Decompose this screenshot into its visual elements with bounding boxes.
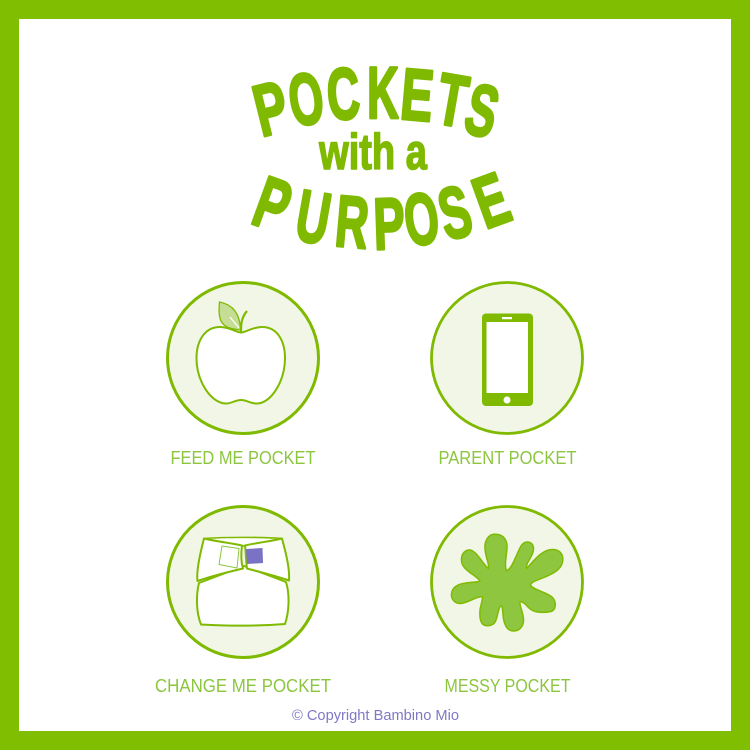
icon: nappy bbox=[197, 537, 289, 626]
icon: smartphone bbox=[482, 314, 533, 406]
title line: POCKETS: K bbox=[367, 53, 399, 134]
panel: messy pocket bbox=[432, 506, 582, 696]
title line: PURPOSE: O bbox=[399, 177, 444, 262]
title line: PURPOSE: P bbox=[243, 162, 301, 249]
title line: POCKETS: C bbox=[324, 52, 362, 136]
title line: POCKETS: S bbox=[458, 67, 507, 154]
copyright: © Copyright Bambino Mio bbox=[292, 707, 459, 724]
title line: POCKETS: T bbox=[431, 59, 474, 144]
panel: change me pocket bbox=[155, 506, 331, 696]
label: parent pocket: PARENT POCKET bbox=[438, 448, 576, 468]
icon circle: phone background bbox=[432, 282, 582, 434]
icon: apple bbox=[196, 302, 285, 404]
title line: with a: with a bbox=[318, 125, 427, 180]
title line: POCKETS bbox=[246, 52, 507, 154]
panel: feed me pocket bbox=[168, 282, 318, 468]
title line: POCKETS: O bbox=[283, 57, 329, 142]
icon: splat bbox=[451, 534, 563, 631]
label: messy pocket: MESSY POCKET bbox=[444, 676, 570, 696]
title line: POCKETS: E bbox=[398, 54, 437, 138]
title line: PURPOSE: E bbox=[463, 157, 520, 244]
panel: parent pocket bbox=[432, 282, 582, 468]
title line: PURPOSE: U bbox=[290, 174, 337, 260]
title line: PURPOSE: P bbox=[372, 183, 406, 265]
label: feed me pocket: FEED ME POCKET bbox=[170, 448, 316, 468]
title bbox=[243, 52, 520, 265]
icon circle: nappy background bbox=[168, 506, 318, 658]
title line: POCKETS: P bbox=[246, 66, 297, 153]
icon circle: splat background bbox=[432, 506, 582, 658]
title line: PURPOSE bbox=[243, 157, 520, 265]
title line: PURPOSE: S bbox=[430, 169, 479, 256]
icon circle: apple background bbox=[168, 282, 318, 434]
label: change me pocket: CHANGE ME POCKET bbox=[155, 676, 331, 696]
title line: PURPOSE: R bbox=[332, 180, 372, 264]
